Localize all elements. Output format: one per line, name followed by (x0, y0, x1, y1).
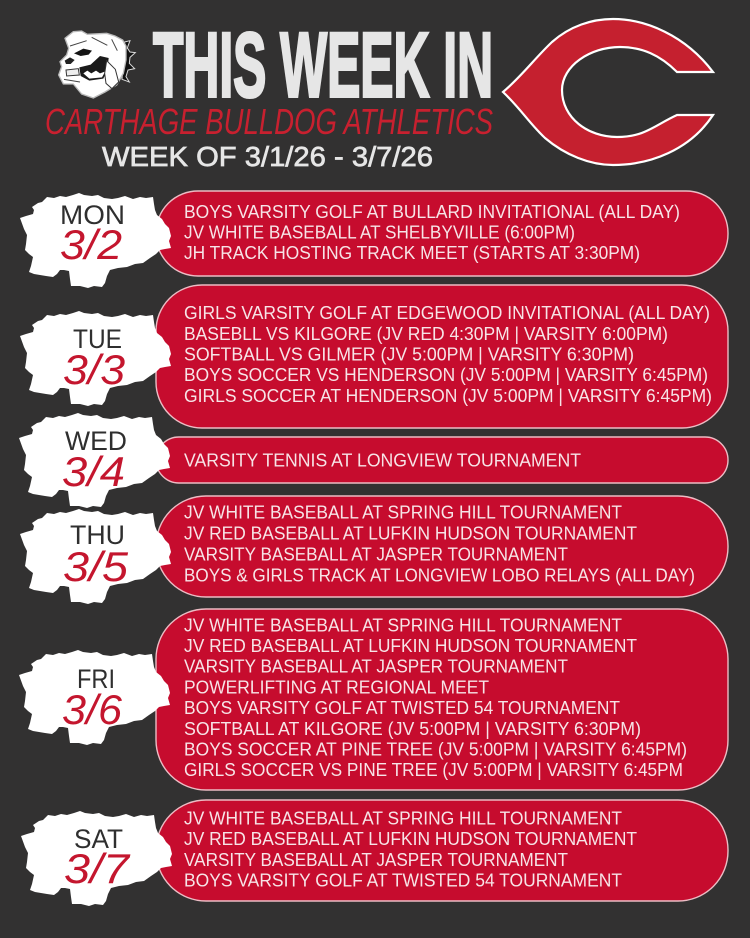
friday date badge: FRI (77, 664, 115, 694)
panel: monday (20, 191, 728, 288)
saturday events (156, 800, 728, 901)
friday date badge: 3/6 (62, 686, 123, 733)
tuesday events: BOYS SOCCER VS HENDERSON (JV 5:00PM | VARSITY 6:45PM) (184, 365, 708, 385)
logo: red C (503, 19, 713, 165)
header (45, 14, 713, 172)
friday events: VARSITY BASEBALL AT JASPER TOURNAMENT (184, 656, 568, 676)
tuesday date badge: 3/3 (63, 346, 125, 393)
wednesday events: VARSITY TENNIS AT LONGVIEW TOURNAMENT (184, 450, 581, 470)
monday events: BOYS VARSITY GOLF AT BULLARD INVITATIONAL (ALL DAY) (184, 202, 680, 222)
thursday events: BOYS & GIRLS TRACK AT LONGVIEW LOBO RELAYS (ALL DAY) (184, 566, 695, 586)
tuesday events: SOFTBALL VS GILMER (JV 5:00PM | VARSITY 6:30PM) (184, 344, 634, 364)
date range: WEEK OF 3/1/26 - 3/7/26 (102, 141, 433, 172)
thursday events: JV WHITE BASEBALL AT SPRING HILL TOURNAMENT (184, 502, 622, 522)
tuesday events: BASEBLL VS KILGORE (JV RED 4:30PM | VARSITY 6:00PM) (184, 324, 668, 344)
wednesday date badge (19, 413, 170, 508)
saturday date badge: SAT (74, 824, 123, 854)
icon: bulldog mascot (59, 31, 135, 98)
monday date badge: MON (60, 200, 125, 230)
monday date badge (20, 193, 171, 288)
thursday date badge: 3/5 (63, 543, 129, 590)
friday events: POWERLIFTING AT REGIONAL MEET (184, 678, 489, 698)
tuesday events: GIRLS VARSITY GOLF AT EDGEWOOD INVITATIONAL (ALL DAY) (184, 303, 710, 323)
tuesday date badge (20, 311, 171, 406)
friday events (156, 609, 728, 790)
saturday events: JV WHITE BASEBALL AT SPRING HILL TOURNAMENT (184, 808, 622, 828)
tuesday date badge: TUE (73, 324, 122, 354)
friday events: SOFTBALL AT KILGORE (JV 5:00PM | VARSITY 6:30PM) (184, 719, 641, 739)
friday events: JV WHITE BASEBALL AT SPRING HILL TOURNAMENT (184, 616, 622, 636)
thursday events (156, 496, 728, 597)
tuesday events: GIRLS SOCCER AT HENDERSON (JV 5:00PM | VARSITY 6:45PM) (184, 386, 712, 406)
panel: tuesday (20, 285, 728, 428)
monday date badge: 3/2 (60, 221, 122, 268)
wednesday date badge: WED (65, 426, 127, 456)
saturday date badge (21, 811, 172, 906)
thursday date badge: THU (70, 520, 125, 550)
panel: friday (19, 609, 728, 790)
monday events (156, 191, 728, 276)
thursday date badge (20, 509, 171, 604)
thursday events: VARSITY BASEBALL AT JASPER TOURNAMENT (184, 544, 568, 564)
friday events: BOYS SOCCER AT PINE TREE (JV 5:00PM | VARSITY 6:45PM) (184, 740, 687, 760)
wednesday date badge: 3/4 (62, 448, 125, 495)
panel: saturday (21, 800, 728, 906)
monday events: JV WHITE BASEBALL AT SHELBYVILLE (6:00PM) (184, 222, 575, 242)
wednesday events (156, 437, 728, 483)
friday events: JV RED BASEBALL AT LUFKIN HUDSON TOURNAMENT (184, 636, 637, 656)
friday events: GIRLS SOCCER VS PINE TREE (JV 5:00PM | VARSITY 6:45PM (184, 760, 683, 780)
panel: thursday (20, 496, 728, 604)
tuesday events (156, 285, 728, 428)
friday events: BOYS VARSITY GOLF AT TWISTED 54 TOURNAMENT (184, 698, 620, 718)
saturday date badge: 3/7 (64, 845, 131, 892)
thursday events: JV RED BASEBALL AT LUFKIN HUDSON TOURNAMENT (184, 524, 637, 544)
friday date badge (19, 650, 170, 745)
saturday events: JV RED BASEBALL AT LUFKIN HUDSON TOURNAMENT (184, 829, 637, 849)
monday events: JH TRACK HOSTING TRACK MEET (STARTS AT 3:30PM) (184, 243, 640, 263)
subtitle: carthage bulldog athletics: CARTHAGE BULLDOG ATHLETICS (45, 101, 493, 142)
saturday events: BOYS VARSITY GOLF AT TWISTED 54 TOURNAMENT (184, 870, 622, 890)
saturday events: VARSITY BASEBALL AT JASPER TOURNAMENT (184, 850, 568, 870)
panel: wednesday (19, 413, 728, 508)
